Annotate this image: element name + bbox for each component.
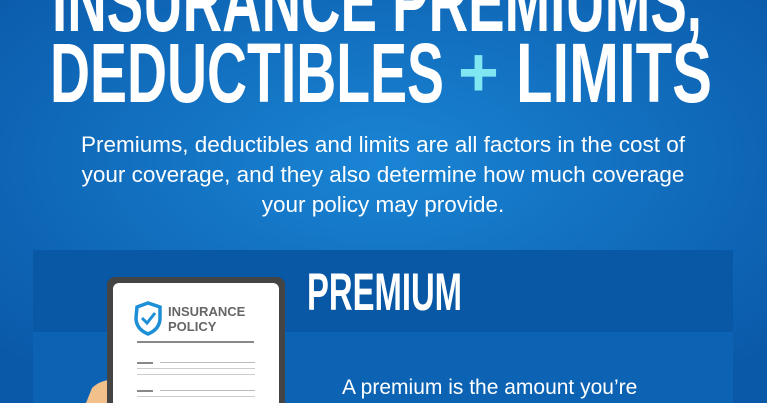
title: DEDUCTIBLES	[50, 26, 444, 120]
heading: premium: PREMIUM	[307, 263, 462, 322]
subtitle: Premiums, deductibles and limits are all factors in the cost of	[81, 132, 686, 157]
panel: premium	[33, 250, 733, 403]
title: +	[458, 33, 499, 111]
icon: tablet with insurance policy: INSURANCE	[168, 304, 246, 319]
icon: tablet with insurance policy: POLICY	[168, 319, 217, 334]
text block: premium description: A premium is the amount you’re	[342, 376, 637, 399]
subtitle: your policy may provide.	[262, 192, 504, 217]
subtitle	[81, 132, 686, 217]
icon: tablet with insurance policy	[107, 277, 285, 403]
subtitle: your coverage, and they also determine how much coverage	[82, 162, 684, 187]
icon: hand	[86, 380, 108, 403]
